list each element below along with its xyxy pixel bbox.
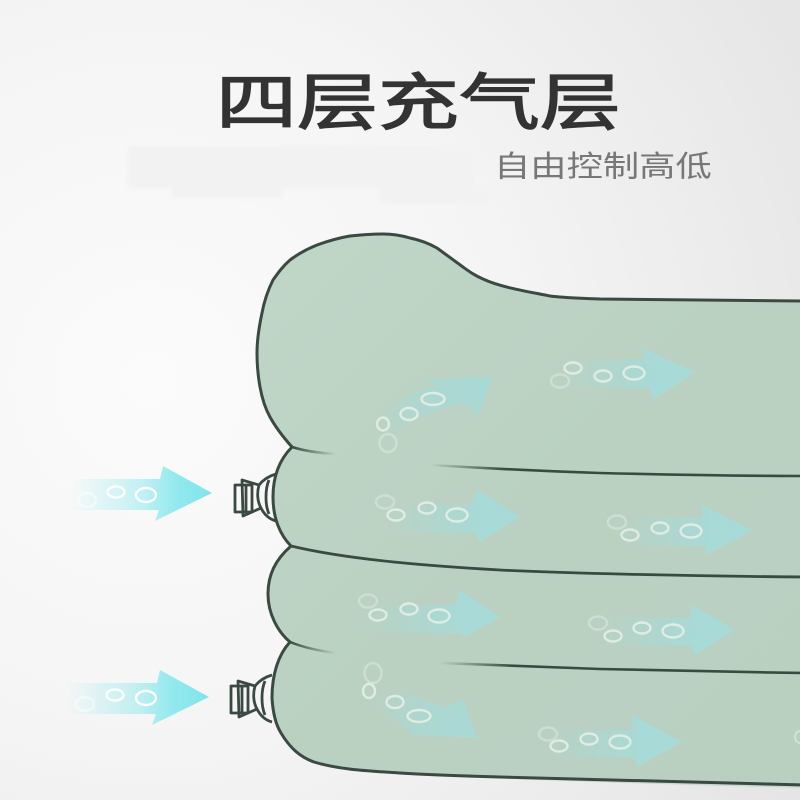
bubbles [608,516,702,540]
valve: upper [235,474,276,521]
arrow: top layer curved [377,377,492,452]
bubbles [589,616,684,642]
bubbles [359,594,450,622]
subtitle: 自由控制高低 [494,150,712,184]
bubbles [539,728,630,752]
arrow: third layer left [359,590,500,637]
arrow: bottom layer right [539,715,682,767]
pillow seam 1 right [430,465,800,476]
bubbles [363,663,430,722]
title: 四层充气层 [216,69,621,138]
arrow: external air in, upper [70,466,212,521]
arrow: bottom layer curved [363,663,477,738]
pillow illustration [257,234,800,788]
arrow: second layer right [608,505,752,555]
blurred patch behind subtitle [128,146,488,204]
bubbles [376,496,468,522]
arrow: second layer left [376,490,520,542]
pillow seam 2 [291,546,800,577]
pillow body [257,234,800,785]
bubbles [377,393,444,452]
edge bubble [795,731,800,743]
pillow seam 3 right [440,663,800,673]
arrow: top layer straight [551,348,695,400]
valve: lower [231,675,272,722]
bubbles [551,362,644,388]
pillow seam 3 [290,642,336,653]
arrow: third layer right [589,605,735,655]
bubbles [76,690,156,711]
pillow drop shadow [300,752,800,788]
bubbles [78,486,156,507]
arrow: external air in, lower [70,670,209,725]
pillow seam 1 [292,447,336,454]
